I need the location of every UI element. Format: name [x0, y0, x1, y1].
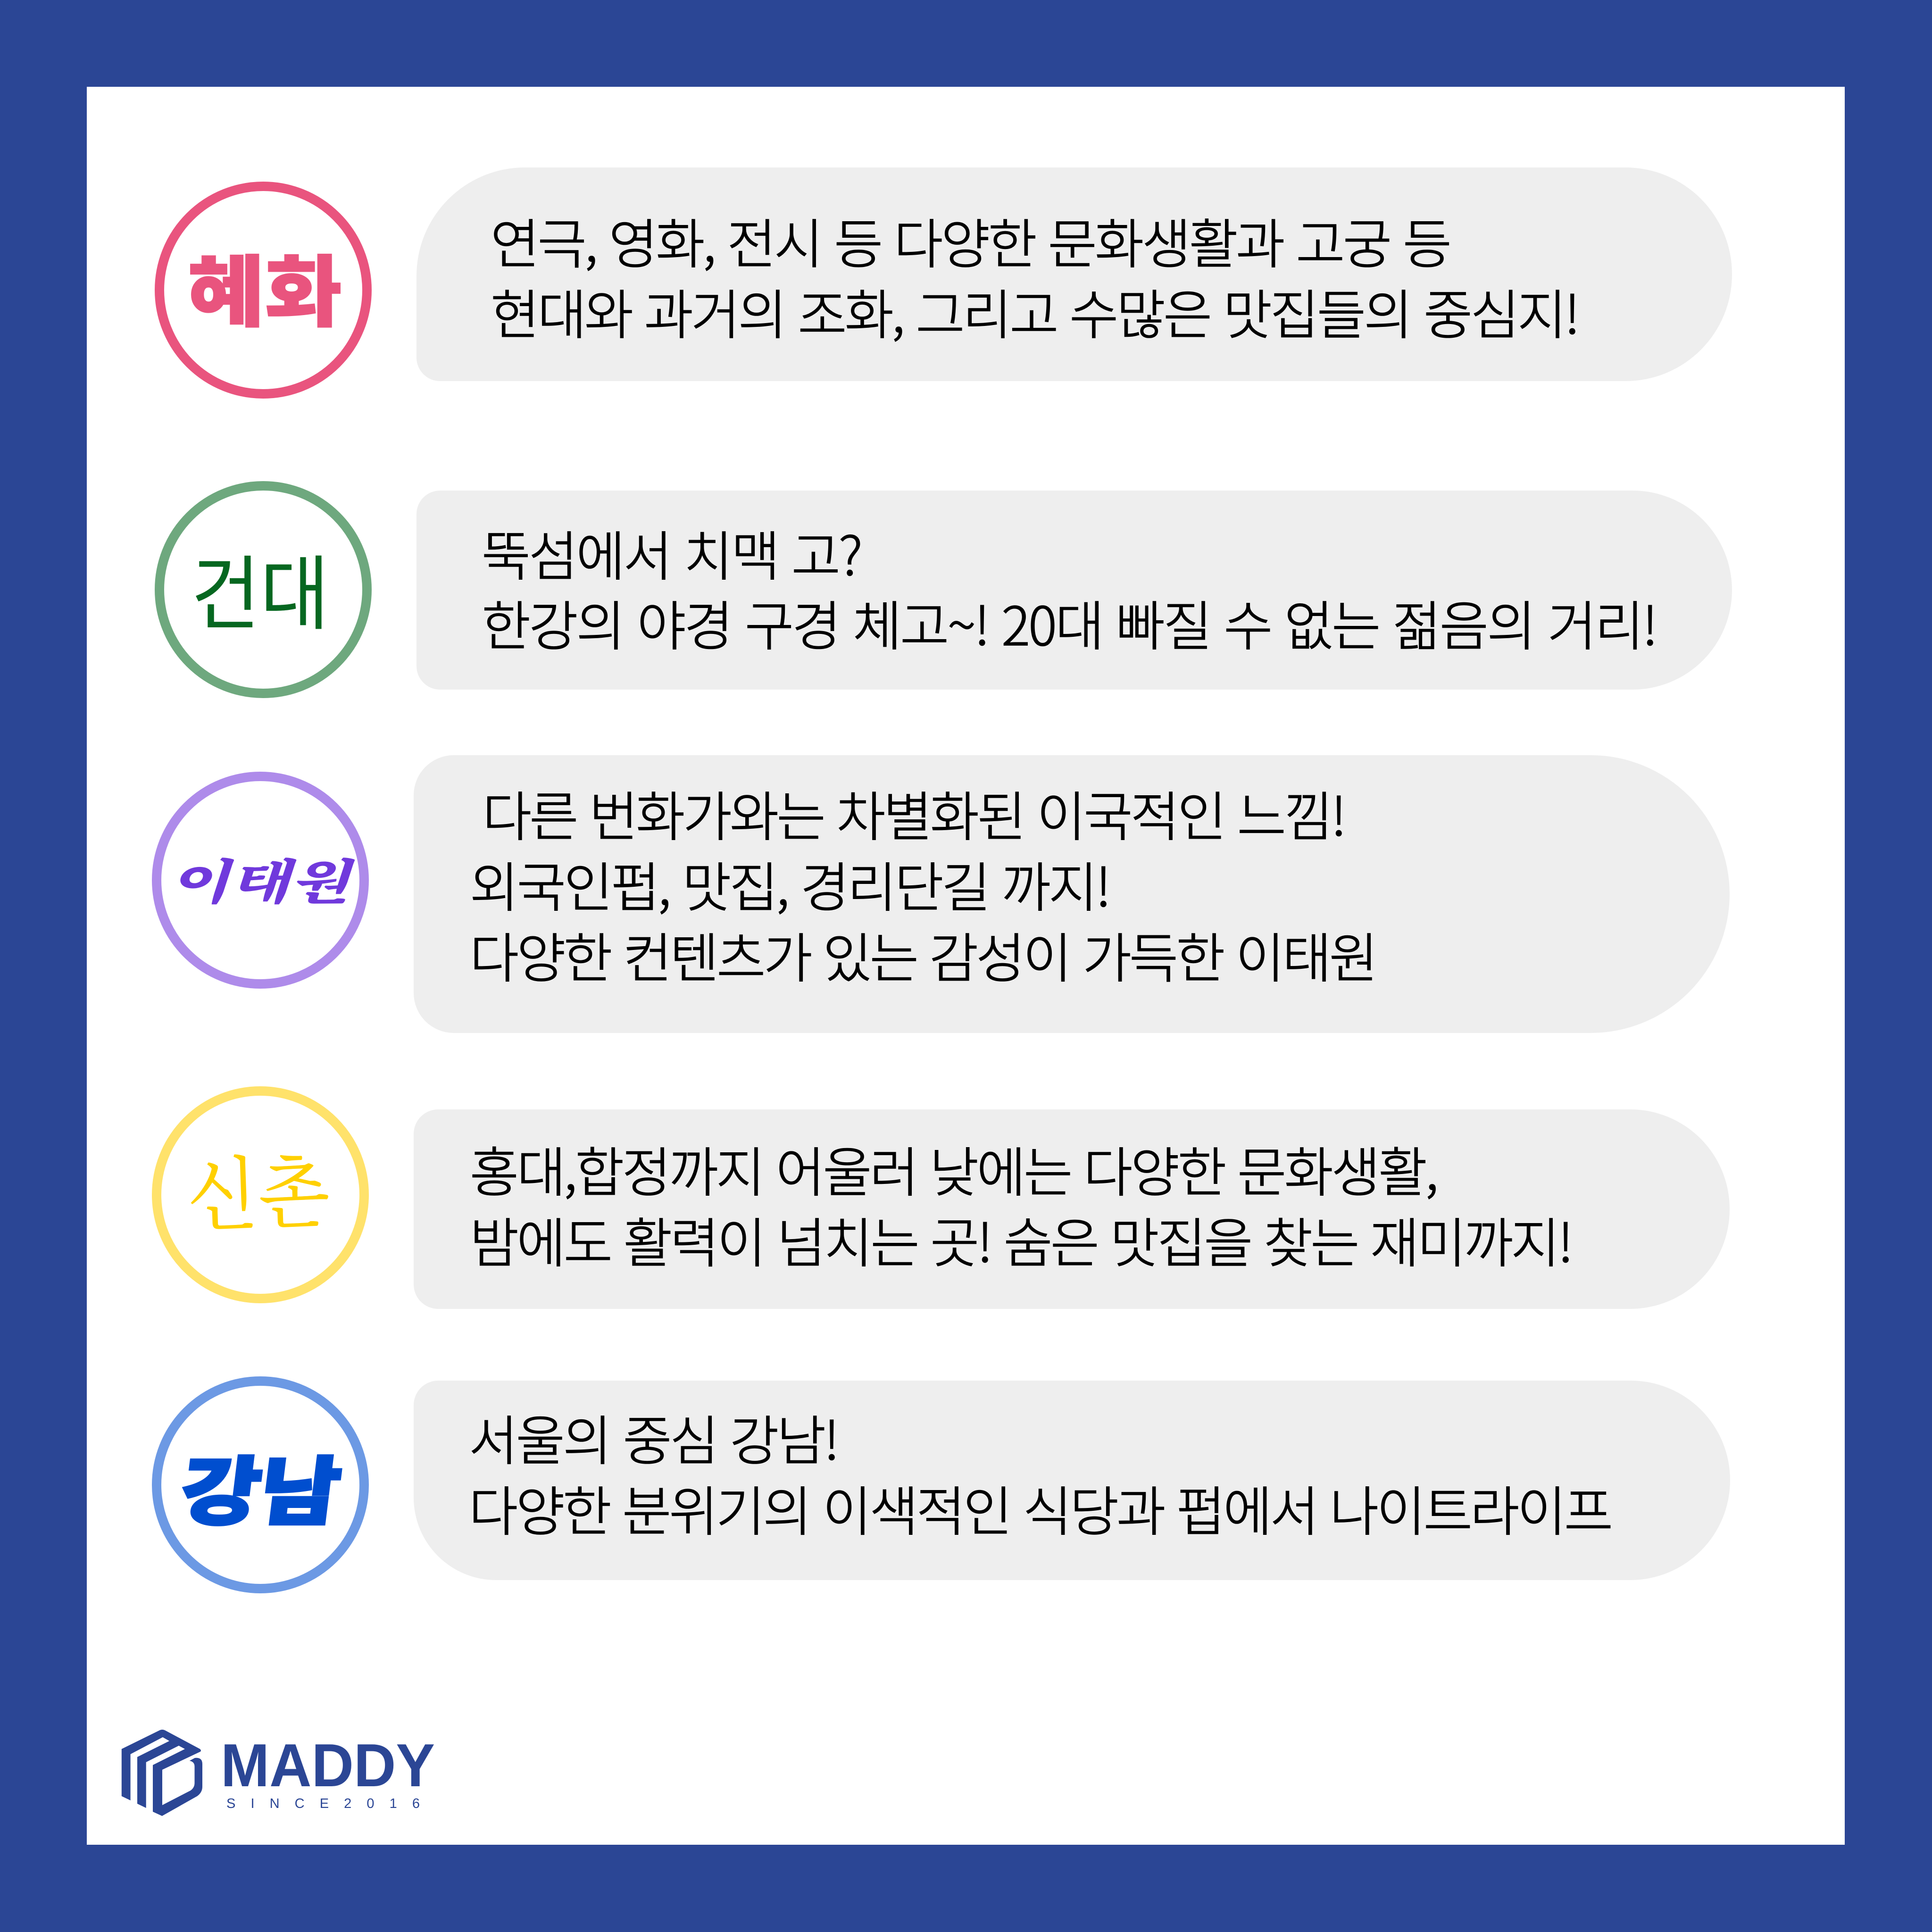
- text: 이태원 description: 다양한 컨텐츠가 있는 감성이 가득한 이태원: [470, 916, 1378, 993]
- text: 이태원 description: 외국인펍, 맛집, 경리단길 까지!: [470, 845, 1111, 922]
- icon: book cube mark: [122, 1730, 202, 1816]
- bubble: 건대: [416, 491, 1732, 690]
- text: 신촌 description: 밤에도 활력이 넘치는 곳! 숨은 맛집을 찾는 재미까지!: [470, 1200, 1574, 1278]
- text: 혜화 description: 연극, 영화, 전시 등 다양한 문화생활과 고궁 등: [491, 201, 1452, 279]
- text: 건대 description: [482, 514, 1658, 661]
- text: 혜화 description: 현대와 과거의 조화, 그리고 수많은 맛집들의 중심지!: [491, 272, 1580, 350]
- bubble: 혜화: [416, 167, 1732, 381]
- text: 신촌 description: [470, 1130, 1574, 1278]
- bubble: 이태원: [414, 755, 1730, 1033]
- row: 신촌: [157, 1091, 1730, 1309]
- text: 강남 description: 서울의 중심 강남!: [469, 1398, 840, 1475]
- bubble: 신촌: [414, 1109, 1730, 1309]
- text: 신촌 description: 홍대,합정까지 어울러 낮에는 다양한 문화생활,: [470, 1130, 1439, 1207]
- text: 혜화 description: [491, 201, 1580, 350]
- text: 이태원 description: 다른 번화가와는 차별화된 이국적인 느낌!: [483, 774, 1347, 851]
- logo: MADDY since 2016: [122, 1730, 435, 1816]
- wordmark: MADDY: MADDY: [221, 1732, 435, 1799]
- row: 이태원: [157, 755, 1730, 1033]
- text: 이태원 description: [470, 774, 1378, 993]
- row: 건대: [159, 486, 1732, 693]
- badge: 강남: 강남: [175, 1433, 347, 1540]
- badge: 건대: 건대: [191, 528, 329, 646]
- badge: 건대: [159, 486, 367, 693]
- badge: 신촌: 신촌: [184, 1127, 332, 1248]
- text: 건대 description: 한강의 야경 구경 체고~! 20대 빠질 수 없는 젊음의 거리!: [482, 583, 1658, 661]
- tagline: SINCE 2016: SINCE2016: [226, 1796, 420, 1811]
- badge: 혜화: 혜화: [188, 230, 342, 342]
- badge: 이태원: [157, 776, 364, 984]
- text: 건대 description: 뚝섬에서 치맥 고?: [482, 514, 863, 591]
- bubble: 강남: [414, 1381, 1730, 1580]
- text: 강남 description: 다양한 분위기의 이색적인 식당과 펍에서 나이트라이프: [469, 1469, 1613, 1546]
- badge: 신촌: [157, 1091, 364, 1299]
- badge: 혜화: [159, 186, 367, 394]
- row: 혜화: [159, 167, 1732, 394]
- badge: 강남: [157, 1381, 364, 1589]
- text: 강남 description: [469, 1398, 1613, 1546]
- row: 강남: [157, 1381, 1730, 1589]
- badge: 이태원: 이태원: [169, 844, 355, 913]
